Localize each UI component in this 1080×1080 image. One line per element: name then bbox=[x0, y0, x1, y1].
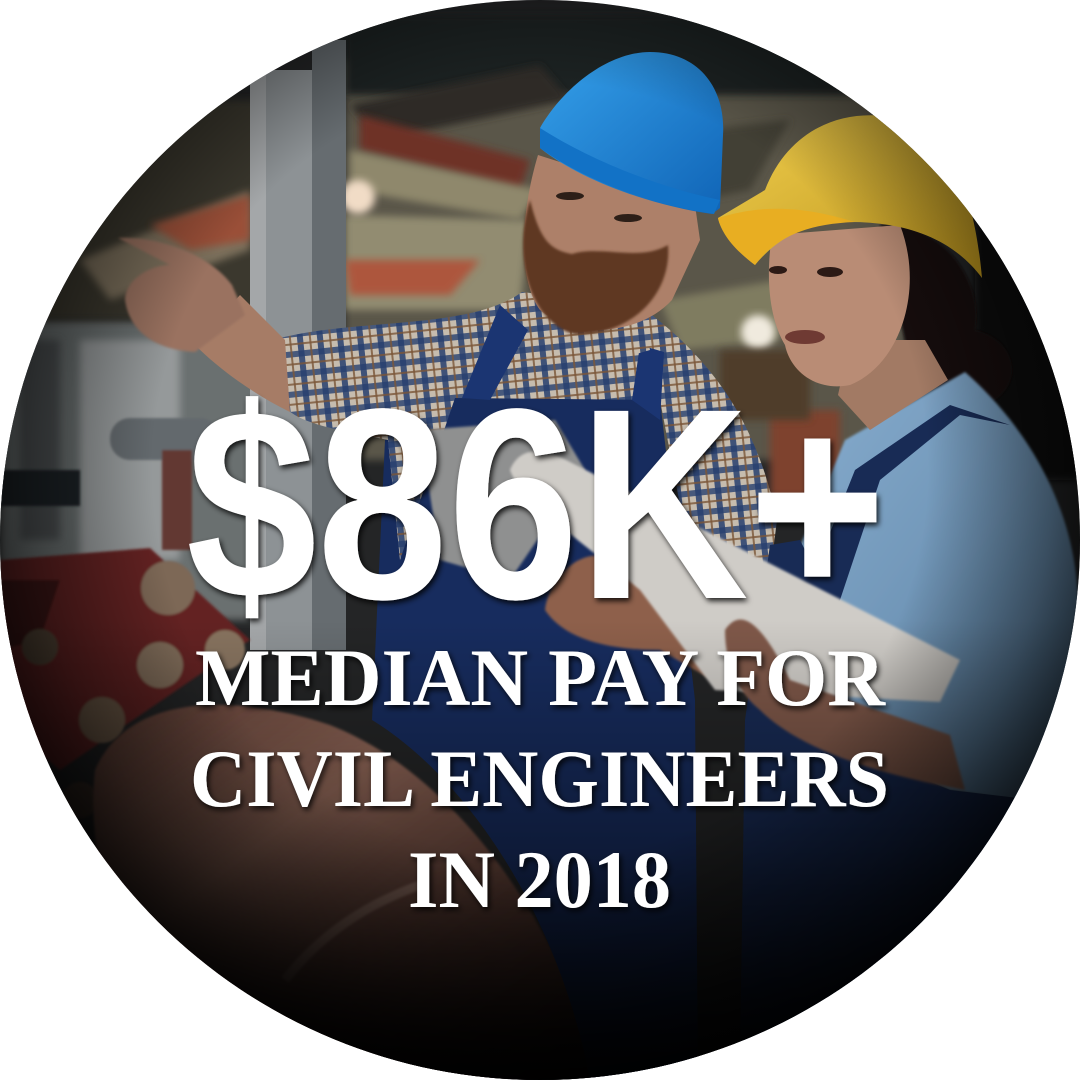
woman: denim shirt bbox=[800, 370, 1078, 800]
caption line 1: MEDIAN PAY FOR bbox=[195, 632, 886, 723]
woman: neck bbox=[838, 340, 948, 430]
flange with bolts bbox=[0, 548, 250, 818]
column bbox=[250, 40, 346, 650]
man: forearm bbox=[195, 295, 290, 412]
valve on left wall bbox=[1, 417, 194, 552]
man: face bbox=[524, 155, 700, 330]
woman: face bbox=[769, 225, 910, 386]
man: holding hand bbox=[544, 554, 706, 678]
man: collar and neck bbox=[638, 345, 650, 354]
large pipe bbox=[93, 705, 600, 1080]
caption line 2: CIVIL ENGINEERS bbox=[190, 733, 889, 824]
paper roll bbox=[510, 451, 960, 702]
woman: hair bbox=[879, 224, 978, 388]
man: beard bbox=[523, 200, 668, 334]
woman: hand and arm bbox=[725, 620, 965, 790]
man: plaid shirt and arm bbox=[282, 292, 776, 564]
pipe weld seam bbox=[310, 882, 417, 952]
woman: overalls bbox=[740, 405, 1035, 1060]
headline figure: $86K+: $86K+ bbox=[186, 352, 886, 656]
woman: eyes and mouth bbox=[769, 266, 843, 344]
man: eyes and brows bbox=[556, 192, 642, 222]
man: apron straps bbox=[462, 305, 664, 420]
caption: median pay for civil engineers in 2018 bbox=[190, 632, 889, 925]
caption line 3: IN 2018 bbox=[408, 834, 671, 925]
man: apron body bbox=[372, 395, 698, 1080]
shadows and vignette bbox=[38, 644, 1052, 1080]
icon: yellow hard hat bbox=[718, 115, 982, 278]
tablet bbox=[420, 420, 585, 580]
icon: blue hard hat bbox=[540, 52, 723, 214]
man: pointing hand bbox=[118, 238, 245, 352]
